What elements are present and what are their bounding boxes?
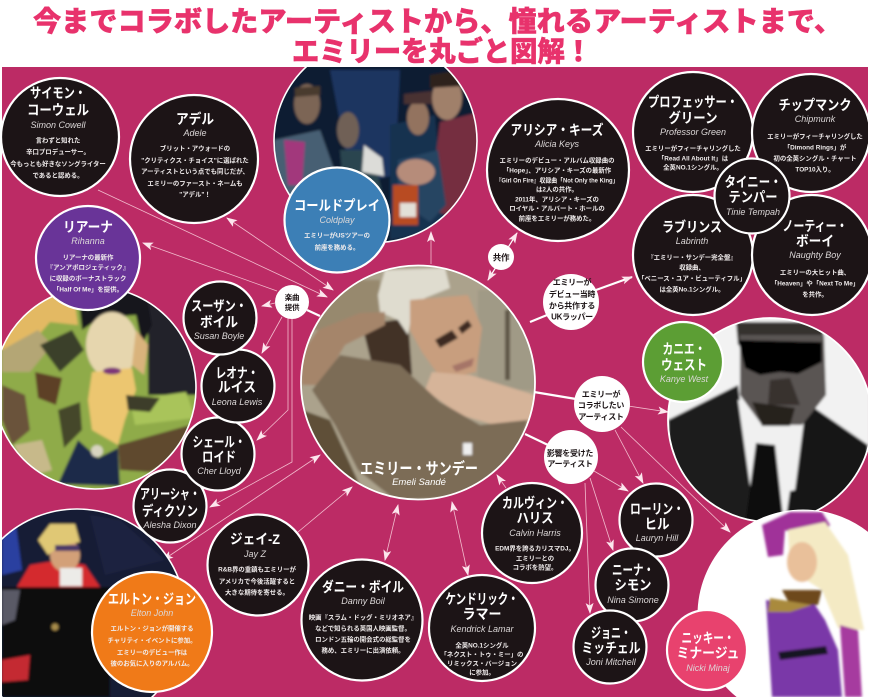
circle: Cher Lloyd: Cher Lloyd xyxy=(197,466,242,476)
circle: Tinie Tempah: Tinie Tempah xyxy=(726,207,780,217)
circle: Rihanna: リアーナの最新作 xyxy=(63,252,114,262)
photo: Kanye West xyxy=(660,315,870,525)
circle: Labrinth: 『エミリー・サンデー完全盤』 xyxy=(647,252,737,262)
circle: Calvin Harris: エミリーとの xyxy=(516,554,554,562)
circle: Naughty Boy: ボーイ xyxy=(796,233,834,249)
label: co-written: 共作 xyxy=(493,252,510,262)
circle: Elton John: チャリティ・イベントに参加。 xyxy=(107,636,197,644)
circle: Coldplay: コールドプレイ xyxy=(294,198,380,214)
circle: Simon Cowell: Simon Cowell xyxy=(30,120,87,130)
title: エミリーを丸ごと図解！ xyxy=(292,35,592,67)
circle: Elton John: エルトン・ジョンが開催する xyxy=(110,624,194,632)
circle: Simon Cowell: 言わずと知れた xyxy=(36,136,80,144)
name: Emeli Sandé: エミリー・サンデー xyxy=(360,459,478,478)
label: UK rappers: UKラッパー xyxy=(551,312,593,322)
circle: Naughty Boy: Naughty Boy xyxy=(789,250,841,260)
arrows: connections between artists xyxy=(98,190,730,613)
circle: Kendrick Lamar: 「ネクスト・トゥ・ミー」の xyxy=(441,650,523,658)
circle: Calvin Harris: Calvin Harris xyxy=(509,528,561,538)
circle: Kendrick Lamar: 全英NO.1シングル xyxy=(455,640,509,650)
circle: Calvin Harris: EDM界を誇るカリスマDJ。 xyxy=(495,544,575,552)
circle: Labrinth: 収録曲、 xyxy=(679,262,705,272)
circle: Jay Z xyxy=(208,514,308,616)
circle: Professor Green: エミリーがフィーチャリングした xyxy=(645,144,741,152)
circle: Danny Boyle: 務め、エミリーに出演依頼。 xyxy=(321,646,405,654)
label: co-written xyxy=(488,244,514,270)
label: songs provided: 楽曲 xyxy=(285,292,299,302)
circle: Alicia Keys: ロイヤル・アルバート・ホールの xyxy=(509,204,605,212)
circle: Kanye West xyxy=(643,322,723,402)
circle: Chipmunk: Chipmunk xyxy=(795,114,836,124)
circle: Lauryn Hill: ローリン・ xyxy=(630,501,684,517)
circle: Coldplay: Coldplay xyxy=(319,215,355,225)
photo: Nicki Minaj xyxy=(698,510,870,700)
circle: Chipmunk: 初の全英シングル・チャート xyxy=(773,154,857,162)
circle: Leona Lewis: ルイス xyxy=(218,379,256,395)
circle: Susan Boyle: ボイル xyxy=(200,314,238,330)
circle: Elton John: 彼のお気に入りのアルバム。 xyxy=(110,658,194,668)
circle: Kendrick Lamar: Kendrick Lamar xyxy=(450,624,515,634)
circle: Jay Z: アメリカで今後活躍すると xyxy=(219,576,295,586)
circle: Chipmunk: チップマンク xyxy=(778,97,852,113)
circle: Kanye West: Kanye West xyxy=(660,374,709,384)
circle: Labrinth xyxy=(633,195,753,315)
circle: Calvin Harris: コラボを熱望。 xyxy=(513,562,557,572)
circle: Cher Lloyd: シェール・ xyxy=(192,434,246,450)
circle: Professor Green: 全英NO.1シングル。 xyxy=(663,162,723,172)
circle: Rihanna: 『アンアポロジェティック』 xyxy=(47,262,129,272)
circle: Nina Simone: Nina Simone xyxy=(607,595,659,605)
circle: Joni Mitchell xyxy=(574,610,646,684)
circle: Chipmunk xyxy=(752,74,870,192)
circle: Cher Lloyd: ロイド xyxy=(202,449,236,465)
circle: Alesha Dixon: アリーシャ・ xyxy=(140,486,200,502)
circle: Danny Boyle: 映画『スラム・ドッグ・ミリオネア』 xyxy=(309,612,417,622)
circle: Elton John xyxy=(92,572,212,692)
circle: Leona Lewis: レオナ・ xyxy=(216,365,258,381)
circle: Nicki Minaj: Nicki Minaj xyxy=(686,663,731,673)
circle: Joni Mitchell: ジョニ・ xyxy=(591,625,631,641)
circle: Calvin Harris xyxy=(482,483,582,583)
circle: Calvin Harris: カルヴィン・ xyxy=(502,495,568,511)
circle: Kendrick Lamar: に参加。 xyxy=(469,668,495,676)
circle: Kendrick Lamar xyxy=(429,575,535,681)
label: wants to collaborate: コラボしたい xyxy=(578,400,624,410)
label: songs provided xyxy=(275,285,309,319)
circle: Nina Simone xyxy=(596,548,668,622)
circle: Simon Cowell: コーウェル xyxy=(27,102,89,118)
circle: Professor Green xyxy=(633,72,753,192)
circle: Naughty Boy: を共作。 xyxy=(802,290,828,298)
label: UK rappers: から共作する xyxy=(549,300,595,310)
circle: Alicia Keys: 2011年、アリシア・キーズの xyxy=(515,194,599,204)
photo: Coldplay xyxy=(273,67,478,243)
circle: Simon Cowell: サイモン・ xyxy=(30,85,86,101)
circle: Labrinth: ラブリンス xyxy=(662,219,722,235)
circle: Danny Boyle: などで知られる英国人映画監督。 xyxy=(315,624,411,632)
circle: Naughty Boy xyxy=(752,195,870,315)
circle: Joni Mitchell: Joni Mitchell xyxy=(585,657,637,667)
circle: Alicia Keys: エミリーのデビュー・アルバム収録曲の xyxy=(500,156,614,164)
circle: Simon Cowell: 今もっとも好きなソングライター xyxy=(10,159,106,168)
circle: Adele: "アデル"！ xyxy=(179,190,211,198)
circle: Alicia Keys: 『Girl On Fire』収録曲「Not Only the King」 xyxy=(496,176,618,184)
circle: Adele: エミリーのファースト・ネームも xyxy=(147,180,243,188)
circle: Alicia Keys: 前座をエミリーが務めた。 xyxy=(519,214,595,222)
circle: Coldplay: 前座を務める。 xyxy=(315,242,359,252)
photo: Rihanna xyxy=(0,285,200,495)
circle: Tinie Tempah xyxy=(714,158,790,234)
circle: Adele: "クリティクス・チョイス"に選ばれた xyxy=(141,156,249,164)
circle: Coldplay: エミリーがUSツアーの xyxy=(304,230,370,240)
circle: Adele: アーティストという点でも同じだが、 xyxy=(141,166,249,176)
circle: Labrinth: Labrinth xyxy=(676,236,708,246)
circle: Labrinth: は全英No.1シングル。 xyxy=(660,284,724,294)
circle: Kanye West: カニエ・ xyxy=(662,341,706,357)
circle: Joni Mitchell: ミッチェル xyxy=(582,640,640,656)
label: wants to collaborate: アーティスト xyxy=(578,412,624,422)
label: wants to collaborate: エミリーが xyxy=(582,389,621,399)
label: songs provided: 提供 xyxy=(285,302,300,312)
circle: Danny Boyle xyxy=(302,560,422,680)
circle: Adele: Adele xyxy=(182,128,207,138)
circle: Alesha Dixon: ディクソン xyxy=(142,503,198,519)
circle: Naughty Boy: エミリーの大ヒット曲、 xyxy=(780,268,850,276)
circle: Alicia Keys: アリシア・キーズ xyxy=(510,122,604,138)
circle: Tinie Tempah: タイニー・ xyxy=(724,174,782,190)
label: UK rappers: エミリーが xyxy=(553,277,592,287)
title xyxy=(33,5,842,67)
circle: Nicki Minaj: ミナージュ xyxy=(676,645,740,661)
circle: Kanye West: ウェスト xyxy=(661,357,707,373)
circle: Lauryn Hill xyxy=(620,484,692,556)
circle: Lauryn Hill: Lauryn Hill xyxy=(636,533,679,543)
circle: Simon Cowell: 辛口プロデューサー。 xyxy=(26,147,90,156)
circle: Calvin Harris: ハリス xyxy=(516,510,554,526)
circle: Professor Green: 「Read All About It」は xyxy=(658,154,729,162)
circle: Chipmunk: TOP10入り。 xyxy=(795,164,835,174)
circle: Jay Z: ジェイ-Z xyxy=(230,531,280,547)
circle: Alicia Keys xyxy=(487,99,629,241)
circle: Kendrick Lamar: ラマー xyxy=(462,606,502,622)
circle: Danny Boyle: ダニー・ボイル xyxy=(322,579,404,595)
photo: Elton John xyxy=(0,505,190,700)
circle: Alicia Keys: 「Hope」、アリシア・キーズの最新作 xyxy=(503,166,612,174)
circle: Adele: ブリット・アウォードの xyxy=(160,144,230,152)
label: UK rappers xyxy=(543,274,599,330)
circle: Susan Boyle: Susan Boyle xyxy=(194,331,244,341)
circle: Leona Lewis xyxy=(202,350,274,422)
circle: Elton John: Elton John xyxy=(131,608,173,618)
circle: Nina Simone: シモン xyxy=(614,577,652,593)
circle: Lauryn Hill: ヒル xyxy=(644,516,670,532)
circle: Coldplay xyxy=(284,168,390,272)
label: influenced by xyxy=(544,430,598,484)
circle: Chipmunk: エミリーがフィーチャリングした xyxy=(767,132,863,140)
circle: Adele: アデル xyxy=(176,111,214,127)
label: influenced by: 影響を受けた xyxy=(547,448,593,458)
circle: Professor Green: グリーン xyxy=(668,110,718,126)
name: Emeli Sandé: Emeli Sandé xyxy=(392,477,446,488)
circle: Kendrick Lamar: リミックス・バージョン xyxy=(447,658,518,668)
circle: Rihanna: 「Half Of Me」を提供。 xyxy=(53,284,123,294)
circle: Adele xyxy=(130,95,258,223)
circle: Jay Z: R&B界の重鎮もエミリーが xyxy=(218,564,296,574)
circle: Nicki Minaj xyxy=(667,610,747,690)
circle: Professor Green: プロフェッサー・ xyxy=(648,94,738,110)
circle: Cher Lloyd xyxy=(182,418,254,490)
circle: Kendrick Lamar: ケンドリック・ xyxy=(446,591,518,607)
circle: Alicia Keys: Alicia Keys xyxy=(534,139,580,149)
circle: Rihanna: に収録のボーナストラック xyxy=(50,274,126,282)
circle: Rihanna: リアーナ xyxy=(63,219,113,235)
circle: Elton John: エルトン・ジョン xyxy=(108,591,196,607)
circle: Nina Simone: ニーナ・ xyxy=(612,562,654,578)
circle: Chipmunk: 「Dimond Rings」が xyxy=(784,142,847,152)
circle: Alesha Dixon xyxy=(134,470,206,542)
circle: Alicia Keys: は2人の共作。 xyxy=(536,184,578,194)
panel: Emeli Sandé main photo xyxy=(300,264,538,502)
circle: Danny Boyle: Danny Boil xyxy=(341,596,386,606)
circle: Alesha Dixon: Alesha Dixon xyxy=(142,520,197,530)
circle: Nicki Minaj: ニッキー・ xyxy=(682,630,734,646)
circle: Elton John: エミリーのデビュー作は xyxy=(117,648,188,656)
circle: Labrinth: 「ベニース・ユア・ビューティフル」 xyxy=(638,274,746,282)
circle: Rihanna: Rihanna xyxy=(71,236,105,246)
circle: Professor Green: Professor Green xyxy=(660,127,726,137)
label: UK rappers: デビュー当時 xyxy=(549,289,595,299)
title: 今までコラボしたアーティストから、憧れるアーティストまで、 xyxy=(33,5,842,37)
circle: Naughty Boy: 「Heaven」や「Next To Me」 xyxy=(771,278,859,288)
circle: Rihanna xyxy=(36,206,140,310)
circle: Simon Cowell xyxy=(1,78,119,196)
label: wants to collaborate xyxy=(574,376,630,432)
name: Emeli Sandé xyxy=(360,459,478,488)
circle: Danny Boyle: ロンドン五輪の開会式の総監督を xyxy=(315,634,411,644)
circle: Jay Z: 大きな期待を寄せる。 xyxy=(225,588,289,596)
circle: Leona Lewis: Leona Lewis xyxy=(212,397,263,407)
circle: Jay Z: Jay Z xyxy=(243,549,266,559)
circle: Susan Boyle xyxy=(184,282,256,354)
circle: Simon Cowell: であると認める。 xyxy=(32,172,84,180)
circle: Naughty Boy: ノーティー・ xyxy=(782,218,848,234)
circle: Tinie Tempah: テンパー xyxy=(728,189,778,205)
label: influenced by: アーティスト xyxy=(547,460,593,468)
circle: Susan Boyle: スーザン・ xyxy=(191,298,247,314)
